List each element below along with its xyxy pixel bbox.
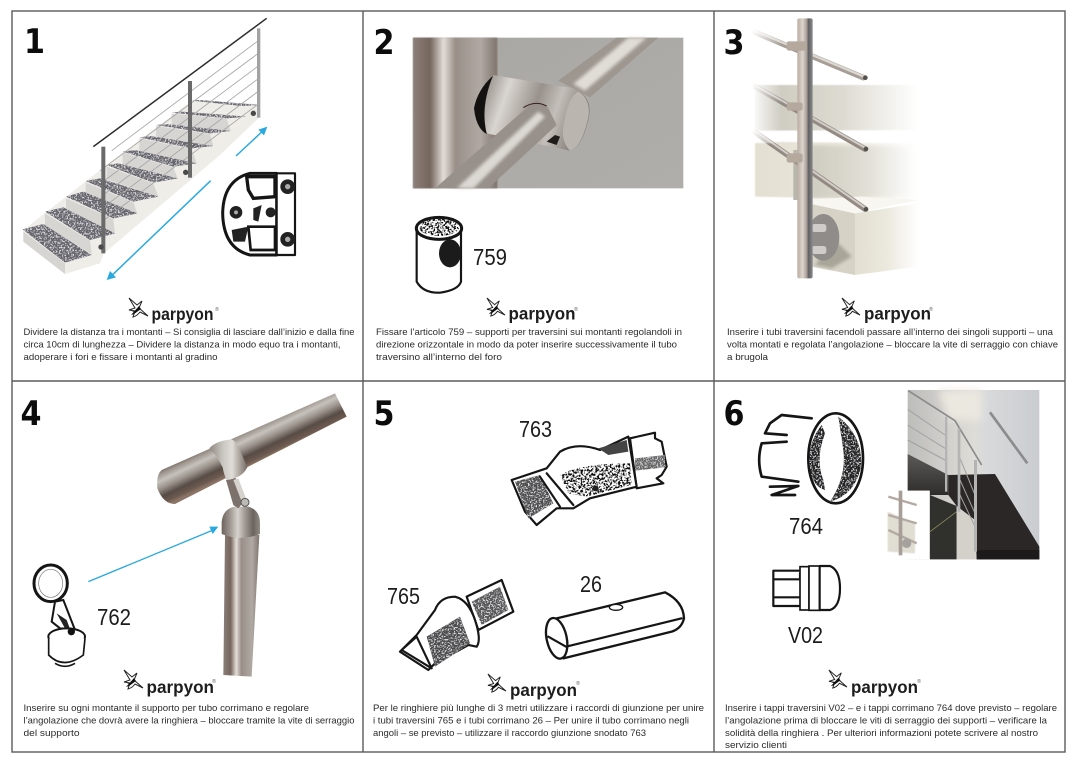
- label 763: 763: [519, 416, 552, 442]
- caption: volta montati e regolata l’angolazione – bloccare la vite di serraggio con chiave: [727, 338, 1058, 350]
- panel: step 4: [20, 393, 354, 738]
- caption: Inserire su ogni montante il supporto per tubo corrimano e regolare: [24, 702, 309, 713]
- caption: [24, 702, 354, 738]
- label 26: 26: [580, 571, 602, 597]
- caption: Fissare l’articolo 759 – supporti per traversini sui montanti regolandoli in: [376, 326, 682, 337]
- icon: bracket sketch: [223, 173, 295, 255]
- logo: [129, 298, 219, 324]
- caption: Inserire i tappi traversini V02 – e i tappi corrimano 764 dove previsto – regolare: [725, 702, 1057, 713]
- arrow: to support: [88, 527, 218, 582]
- caption: circa 10cm di lunghezza – Dividere la distanza in modo equo tra i montanti,: [24, 338, 340, 350]
- step number 2: 2: [374, 23, 394, 63]
- icon: part 763 sketch: [512, 433, 667, 525]
- logo: ®: [212, 678, 216, 685]
- logo: parpyon: [510, 680, 577, 700]
- logo: [829, 670, 921, 697]
- caption: [725, 702, 1057, 750]
- caption: Inserire i tubi traversini facendoli passare all’interno dei singoli supporti – una: [727, 326, 1054, 337]
- caption: traversino all’interno del foro: [376, 351, 502, 362]
- icon: part 764 sketch: [759, 413, 863, 503]
- label 762: 762: [97, 604, 131, 630]
- step number 1: 1: [24, 22, 45, 62]
- photo: handrail support on post: [157, 393, 347, 677]
- logo: parpyon: [864, 304, 931, 324]
- icon: part 762 sketch: [34, 565, 85, 666]
- photo: support on post: [413, 38, 683, 188]
- caption: [24, 326, 354, 362]
- logo: parpyon: [146, 677, 214, 697]
- caption: del supporto: [24, 727, 80, 738]
- panel: step 2: [374, 23, 683, 362]
- logo: parpyon: [508, 304, 576, 324]
- caption: direzione orizzontale in modo da poter inserire successivamente il tubo: [376, 338, 677, 350]
- step number 4: 4: [20, 394, 42, 434]
- icon: part 26 sketch: [543, 592, 684, 661]
- label 765: 765: [387, 583, 420, 609]
- caption: Dividere la distanza tra i montanti – Si consiglia di lasciare dall’inizio e dalla fine: [24, 326, 354, 337]
- logo: parpyon: [851, 677, 918, 697]
- caption: [373, 702, 704, 738]
- label V02: V02: [788, 622, 823, 648]
- photo: finished staircase: [908, 390, 1039, 559]
- panel: step 3: [724, 18, 1058, 362]
- logo: [842, 298, 933, 324]
- step number 3: 3: [724, 23, 744, 63]
- illustration: post with crossbars: [752, 18, 918, 278]
- logo: [488, 674, 580, 700]
- icon: part V02 sketch: [773, 566, 840, 610]
- logo: [124, 670, 216, 697]
- logo: ®: [574, 306, 578, 313]
- label 764: 764: [789, 513, 823, 539]
- caption: servizio clienti: [725, 739, 787, 750]
- step number 6: 6: [724, 394, 744, 434]
- caption: a brugola: [727, 351, 769, 362]
- caption: adoperare i fori e fissare i montanti al gradino: [24, 351, 218, 362]
- logo: [487, 298, 578, 324]
- panel: step 5: [373, 394, 704, 738]
- caption: [727, 326, 1058, 362]
- arrow: short blue: [236, 127, 267, 156]
- label 759: 759: [473, 244, 507, 270]
- inset: post detail: [888, 491, 929, 559]
- caption: i tubi traversini 765 e i tubi corrimano 26 – Per unire il tubo corrimano negli: [373, 714, 689, 726]
- panel: step 6: [724, 390, 1057, 750]
- icon: part 759 sketch: [416, 217, 462, 293]
- logo: ®: [929, 306, 933, 313]
- icon: part 765 sketch: [400, 580, 513, 670]
- caption: solidità della ringhiera . Per ulteriori informazioni potete scrivere al nostro: [725, 727, 1038, 738]
- step number 5: 5: [374, 394, 394, 434]
- illustration: staircase with cable railing: [23, 18, 267, 274]
- logo: ®: [917, 678, 921, 685]
- caption: [376, 326, 682, 362]
- caption: l’angolazione prima di bloccare le viti di serraggio dei supporti – verificare la: [725, 714, 1048, 726]
- caption: Per le ringhiere più lunghe di 3 metri utilizzare i raccordi di giunzione per unire: [373, 702, 704, 713]
- logo: ®: [576, 680, 580, 687]
- caption: l’angolazione che dovrà avere la ringhiera – bloccare tramite la vite di serraggio: [24, 714, 354, 726]
- logo: ®: [215, 306, 219, 313]
- arrow: long blue: [107, 181, 211, 280]
- panel: step 1: [23, 18, 354, 362]
- caption: angoli – se previsto – utilizzare il raccordo giunzione snodato 763: [373, 727, 646, 738]
- logo: parpyon: [152, 304, 214, 324]
